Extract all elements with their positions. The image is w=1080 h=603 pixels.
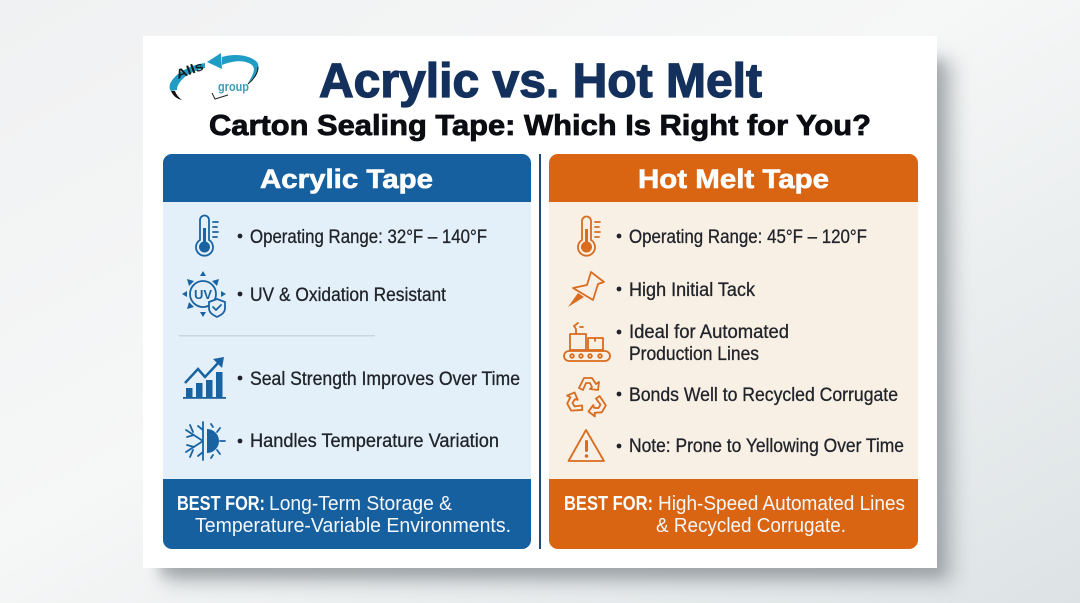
acrylic best for: BEST FOR: xyxy=(177,492,265,515)
item: tack: High Initial Tack xyxy=(629,279,755,301)
logo: group xyxy=(218,80,249,94)
panel: acrylic tape xyxy=(163,154,531,549)
hot melt best for: High-Speed Automated Lines xyxy=(658,492,905,515)
card shadow xyxy=(160,60,953,582)
hot melt best for xyxy=(549,479,918,549)
acrylic header: Acrylic Tape xyxy=(260,164,433,194)
icon: uv shield: UV xyxy=(194,287,212,302)
icon: thermometer xyxy=(196,216,218,256)
acrylic best for xyxy=(163,479,531,549)
acrylic header xyxy=(163,154,531,202)
icon: uv shield xyxy=(182,271,226,317)
item: operating range: Operating Range: 45°F – 120°F xyxy=(629,226,867,248)
icon: warning xyxy=(568,430,604,461)
item: automated lines: Production Lines xyxy=(629,343,759,365)
icon: snow and sun xyxy=(186,422,225,460)
item: uv resistant: UV & Oxidation Resistant xyxy=(250,284,447,306)
subtitle: Carton Sealing Tape: Which Is Right for You? xyxy=(209,110,871,142)
hot melt best for: & Recycled Corrugate. xyxy=(656,514,846,537)
item: temperature variation: Handles Temperature Variation xyxy=(250,430,499,452)
item: note: Note: Prone to Yellowing Over Time xyxy=(629,435,904,457)
acrylic best for: Long-Term Storage & xyxy=(269,492,452,515)
hot melt header xyxy=(549,154,918,202)
card xyxy=(143,36,937,568)
icon: recycle xyxy=(564,378,608,418)
logo: Alls xyxy=(174,58,205,82)
acrylic best for: Temperature-Variable Environments. xyxy=(195,514,511,537)
title: Acrylic vs. Hot Melt xyxy=(319,55,762,108)
item: operating range: Operating Range: 32°F – 140°F xyxy=(250,226,487,248)
item: recycled: Bonds Well to Recycled Corrugate xyxy=(629,384,898,406)
hot melt best for: BEST FOR: xyxy=(564,492,653,515)
item: automated lines: Ideal for Automated xyxy=(629,321,789,343)
item: seal strength: Seal Strength Improves Over Time xyxy=(250,368,520,390)
icon: rising chart xyxy=(183,357,226,399)
hot melt header: Hot Melt Tape xyxy=(638,164,829,194)
panel: hot melt tape xyxy=(549,154,918,549)
logo xyxy=(170,53,259,100)
icon: push pin xyxy=(568,272,604,307)
icon: conveyor xyxy=(564,323,610,361)
divider xyxy=(539,154,541,549)
icon: thermometer xyxy=(578,216,600,256)
item: automated lines xyxy=(617,321,789,365)
